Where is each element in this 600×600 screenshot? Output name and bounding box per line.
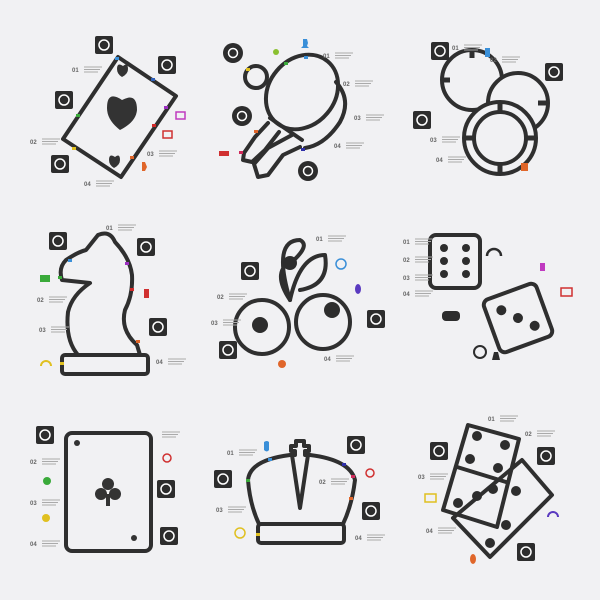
labels: 02: [343, 82, 350, 88]
panel: chess knight: [37, 225, 186, 374]
labels: [430, 45, 520, 164]
icons: [36, 426, 178, 545]
labels: 04: [84, 182, 91, 188]
labels: 01: [72, 68, 79, 74]
icons: [219, 39, 318, 181]
labels: [37, 225, 186, 366]
icons: [442, 249, 572, 360]
labels: 01: [227, 451, 234, 457]
labels: 02: [217, 295, 224, 301]
labels: 01: [106, 226, 113, 232]
labels: [323, 53, 384, 150]
labels: 02: [37, 298, 44, 304]
icons: [413, 42, 563, 171]
labels: [30, 67, 177, 188]
labels: 03: [30, 501, 37, 507]
labels: [403, 239, 433, 298]
labels: 01: [452, 46, 459, 52]
labels: 03: [430, 138, 437, 144]
labels: 03: [147, 152, 154, 158]
panel: dominoes: [418, 416, 558, 564]
paddles: [243, 40, 353, 177]
color dots: [58, 259, 140, 365]
labels: 03: [354, 116, 361, 122]
labels: 02: [490, 58, 497, 64]
labels: 03: [403, 276, 410, 282]
front domino: [443, 425, 519, 527]
icons: [425, 442, 558, 564]
labels: 02: [525, 432, 532, 438]
labels: 04: [324, 357, 331, 363]
panel: playing card clubs: [30, 426, 180, 551]
color dots: [239, 56, 308, 154]
panel: cherries: [211, 236, 385, 368]
panel: playing card hearts: [30, 36, 185, 188]
labels: [216, 450, 385, 542]
icons: [214, 436, 380, 538]
color dots: [72, 57, 168, 159]
labels: 04: [334, 144, 341, 150]
labels: 04: [30, 542, 37, 548]
labels: 02: [30, 140, 37, 146]
card outline: [63, 57, 176, 177]
labels: 03: [39, 328, 46, 334]
labels: 04: [403, 292, 410, 298]
labels: 04: [436, 158, 443, 164]
panel: ping pong: [219, 39, 384, 181]
labels: [418, 416, 555, 535]
labels: 03: [211, 321, 218, 327]
hearts: [107, 65, 137, 168]
icons: [40, 232, 167, 366]
labels: 02: [30, 460, 37, 466]
back domino: [453, 460, 552, 557]
labels: [30, 432, 180, 548]
knight outline: [61, 234, 140, 355]
labels: [211, 236, 354, 363]
icons: [51, 36, 185, 173]
icons: [219, 259, 385, 368]
labels: 02: [319, 480, 326, 486]
labels: 01: [403, 240, 410, 246]
labels: 01: [316, 237, 323, 243]
labels: 04: [355, 536, 362, 542]
labels: 04: [426, 529, 433, 535]
panel: crown: [214, 436, 385, 543]
panel: poker chips: [413, 42, 563, 174]
color dots: [246, 458, 355, 536]
labels: 03: [418, 475, 425, 481]
labels: 04: [156, 360, 163, 366]
labels: 01: [323, 54, 330, 60]
labels: 01: [488, 417, 495, 423]
panel: dice: [403, 235, 572, 360]
labels: 02: [403, 258, 410, 264]
labels: 03: [216, 508, 223, 514]
